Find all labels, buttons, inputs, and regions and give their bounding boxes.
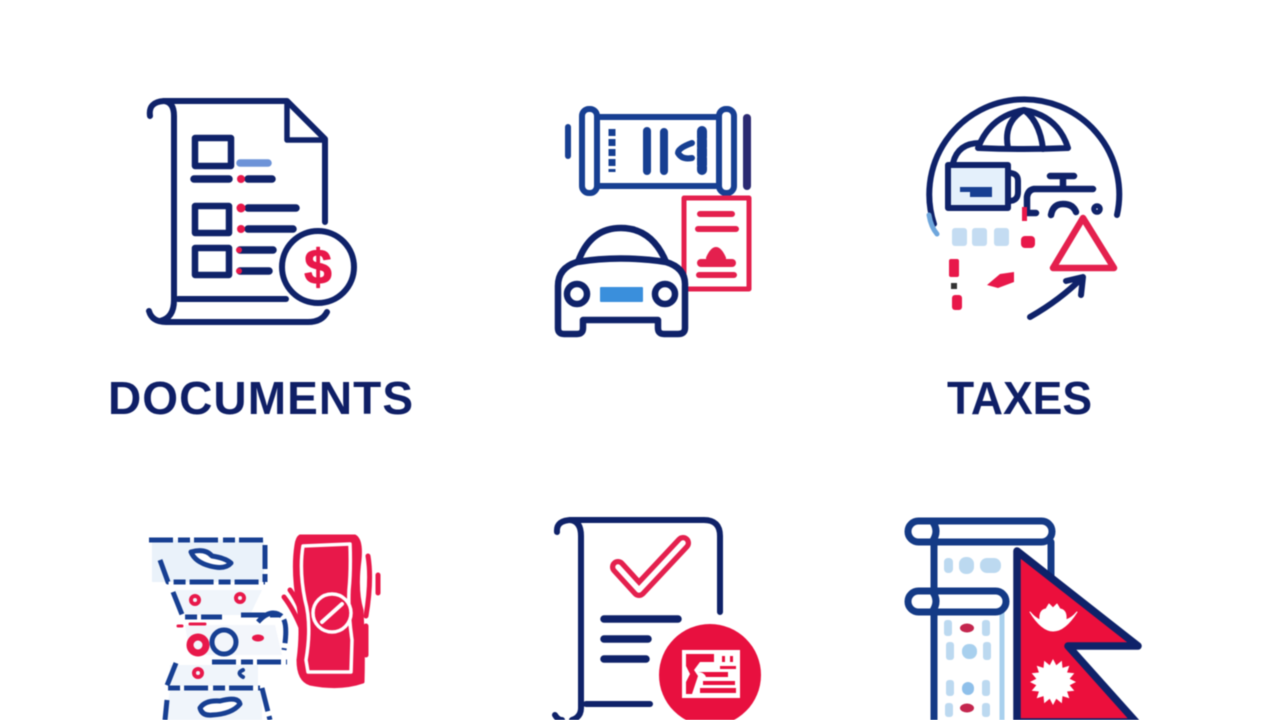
blue scroll — [568, 109, 747, 193]
faded blobs — [952, 228, 1009, 246]
icon: taxes collage — [929, 99, 1119, 317]
dollar badge: $ — [304, 241, 332, 295]
icon: approved document — [555, 520, 761, 720]
icon: car with scroll and red document — [558, 109, 749, 334]
icon: document with dollar — [149, 101, 354, 322]
dollar badge — [282, 231, 354, 303]
warning triangle — [1053, 218, 1114, 268]
check mark — [618, 543, 683, 590]
text lines — [604, 619, 678, 659]
moon — [1030, 604, 1077, 631]
sun — [1030, 659, 1076, 705]
arrow — [1030, 277, 1083, 317]
red banknote — [284, 536, 378, 687]
icon: scrolls with Nepal flag — [908, 521, 1138, 720]
big arc — [929, 99, 1119, 224]
red document — [684, 198, 749, 289]
car — [558, 228, 685, 334]
faded script — [944, 557, 1001, 717]
icon: banknotes with prohibited sign — [149, 536, 378, 720]
scroll outline — [555, 520, 720, 720]
heading: documents: DOCUMENTS — [108, 372, 413, 424]
heading: taxes: TAXES — [947, 372, 1092, 424]
umbrella — [953, 110, 1068, 163]
red fragments — [949, 207, 1035, 310]
faucet — [1027, 176, 1100, 215]
mug — [948, 165, 1018, 208]
Nepal flag — [1017, 551, 1138, 720]
scrolls — [908, 521, 1052, 720]
fading blue note stack — [149, 540, 287, 720]
red id badge — [659, 624, 761, 720]
